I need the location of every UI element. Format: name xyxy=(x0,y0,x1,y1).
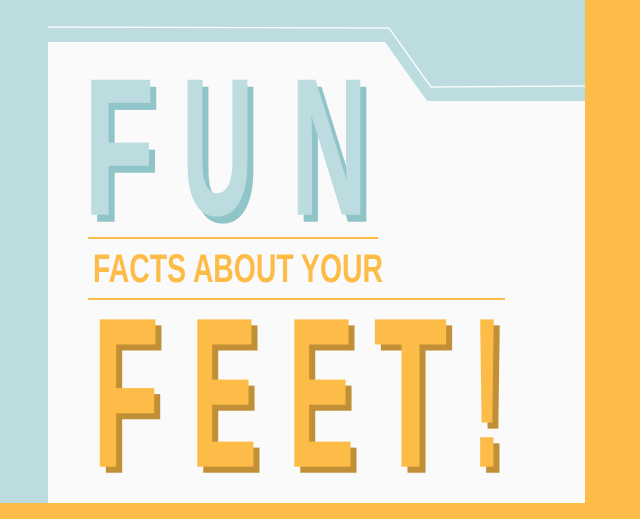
divider bottom xyxy=(88,298,505,300)
title: FUN: N xyxy=(297,46,373,263)
title: FEET!: F xyxy=(93,274,159,511)
title: FEET!: ! xyxy=(472,274,502,511)
title: FEET!: E xyxy=(288,274,354,511)
title: FEET!: E xyxy=(294,280,360,517)
title: FUN: U xyxy=(188,46,259,263)
title: FEET!: T xyxy=(380,280,453,517)
title: FEET!: T xyxy=(374,274,447,511)
text: ! xyxy=(478,280,508,517)
title: FEET!: E xyxy=(191,274,257,511)
title: FUN: F xyxy=(84,39,154,256)
title: FUN: U xyxy=(182,39,253,256)
title: FEET!: F xyxy=(99,280,165,517)
subtitle: FACTS ABOUT YOUR: FACTS ABOUT YOUR xyxy=(93,247,383,291)
title: FUN: F xyxy=(90,46,160,263)
divider top xyxy=(88,237,378,239)
title: FEET! xyxy=(93,274,508,517)
title: FUN: N xyxy=(291,39,367,256)
title: FEET!: E xyxy=(197,280,263,517)
title: FUN xyxy=(84,39,373,263)
